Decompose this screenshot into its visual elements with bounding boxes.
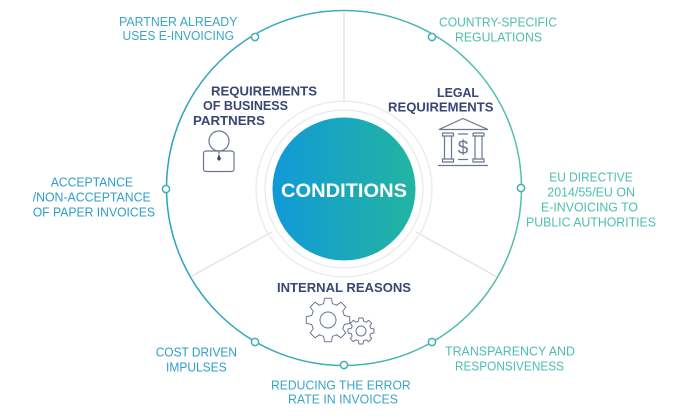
label: eu directive — [526, 170, 656, 230]
label: reducing the error rate — [271, 378, 411, 406]
heading: legal requirements — [388, 86, 494, 114]
label: transparency and responsiveness: RESPONSIVENESS — [455, 360, 564, 374]
label: reducing the error rate: REDUCING THE ERROR — [271, 378, 411, 392]
label: acceptance of paper invoices: /NON-ACCEPTANCE — [33, 190, 151, 204]
inner rings — [256, 101, 432, 277]
label: acceptance of paper invoices — [33, 176, 155, 220]
heading: requirements of business partners — [193, 84, 317, 128]
label: partner already uses e-invoicing: USES E-INVOICING — [122, 29, 234, 43]
label: country-specific regulations — [439, 16, 557, 44]
label: eu directive: PUBLIC AUTHORITIES — [526, 216, 656, 230]
label: eu directive: E-INVOICING TO — [541, 200, 638, 214]
icon: gears — [306, 298, 374, 344]
heading: legal requirements: LEGAL — [437, 86, 479, 100]
heading: requirements of business partners: REQUIREMENTS — [211, 84, 317, 98]
label: cost driven impulses: IMPULSES — [166, 360, 227, 374]
outer ring — [166, 10, 522, 366]
label: cost driven impulses — [156, 346, 237, 374]
icon: business person — [204, 131, 234, 172]
segment dividers — [192, 12, 497, 277]
heading: legal requirements: REQUIREMENTS — [388, 100, 494, 114]
label: eu directive: EU DIRECTIVE — [549, 170, 633, 184]
label: acceptance of paper invoices: OF PAPER INVOICES — [33, 206, 155, 220]
heading: internal reasons: INTERNAL REASONS — [277, 281, 411, 295]
icon: bank — [438, 118, 488, 166]
label: country-specific regulations: REGULATIONS — [455, 30, 542, 44]
label: reducing the error rate: RATE IN INVOICES — [288, 392, 398, 406]
label: eu directive: 2014/55/EU ON — [547, 186, 635, 200]
label: partner already uses e-invoicing — [119, 15, 238, 43]
label: acceptance of paper invoices: ACCEPTANCE — [51, 176, 133, 190]
heading: requirements of business partners: PARTNERS — [193, 114, 265, 128]
ring markers — [162, 33, 525, 369]
icon: bank: $ — [458, 138, 469, 159]
label: transparency and responsiveness: TRANSPARENCY AND — [445, 344, 575, 358]
label: cost driven impulses: COST DRIVEN — [156, 346, 237, 360]
label: country-specific regulations: COUNTRY-SPECIFIC — [439, 16, 557, 30]
label: partner already uses e-invoicing: PARTNER ALREADY — [119, 15, 238, 29]
heading: requirements of business partners: OF BUSINESS — [203, 99, 288, 113]
label: transparency and responsiveness — [445, 344, 575, 374]
center circle: conditions — [272, 118, 416, 260]
center circle: conditions: CONDITIONS — [281, 181, 407, 202]
